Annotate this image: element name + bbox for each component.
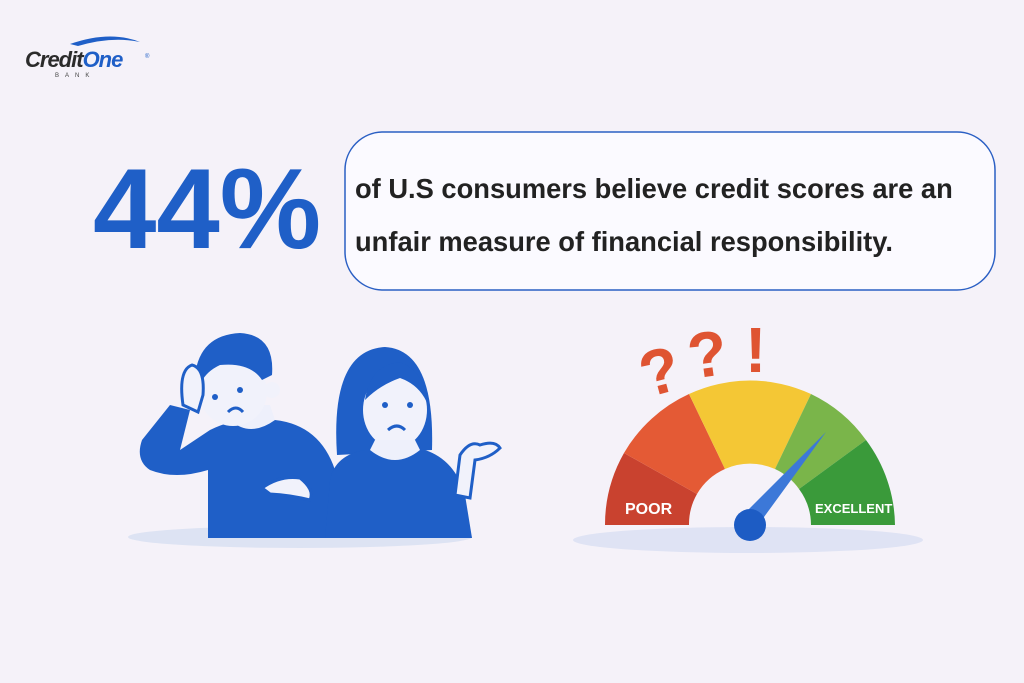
callout bubble: of U.S consumers believe credit scores are an (355, 173, 953, 204)
man head (199, 358, 267, 426)
man open hand (262, 477, 311, 500)
big statistic 44%: 44% (93, 146, 321, 273)
woman head (363, 372, 427, 448)
logo: Credit One Bank (25, 36, 150, 79)
needle (742, 432, 826, 528)
man body (140, 405, 340, 538)
gauge segments (605, 453, 697, 525)
question marks and exclamation: ? (683, 316, 732, 393)
illustration: confused couple (128, 333, 500, 548)
woman raised hand (455, 443, 500, 498)
callout bubble: unfair measure of financial responsibility. (355, 226, 893, 257)
man neck (230, 405, 275, 429)
question marks and exclamation (632, 314, 766, 411)
woman hair (336, 347, 432, 455)
gauge: credit score meter (573, 314, 923, 553)
woman body (325, 450, 472, 538)
man hand on head (182, 365, 203, 412)
logo: Credit One Bank: CreditOne (25, 47, 123, 72)
logo: Credit One Bank: BANK (55, 73, 95, 79)
question marks and exclamation: ? (632, 332, 688, 411)
label POOR: POOR (625, 501, 673, 518)
callout bubble (345, 132, 995, 290)
logo: Credit One Bank: ® (145, 53, 150, 60)
label EXCELLENT: EXCELLENT (815, 501, 892, 516)
question marks and exclamation: ! (745, 314, 766, 386)
